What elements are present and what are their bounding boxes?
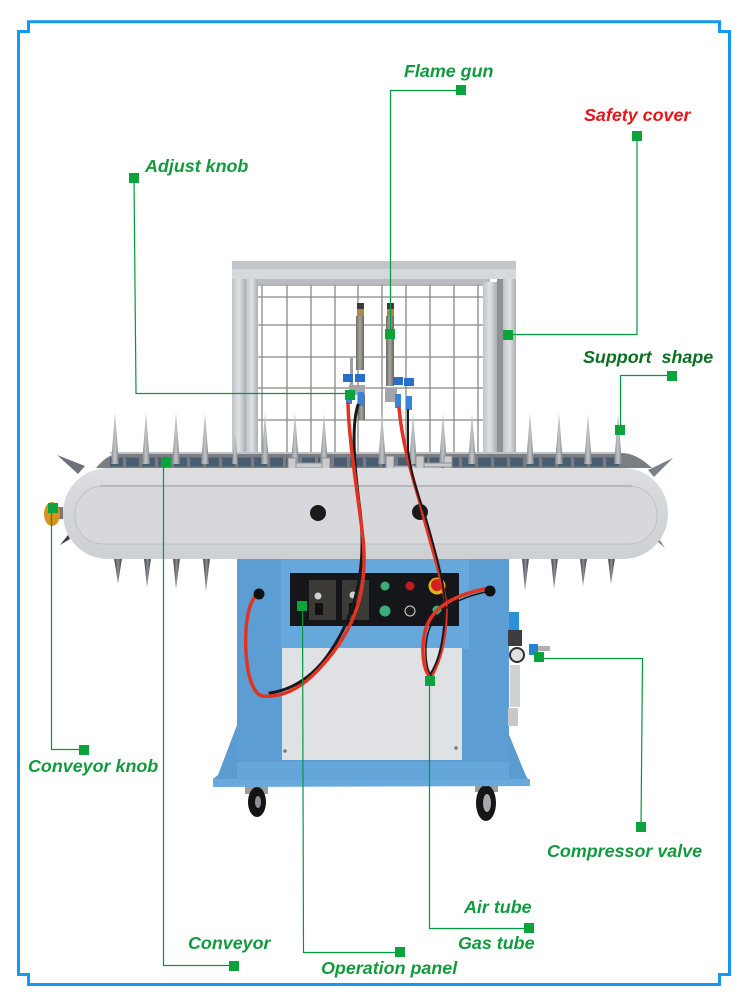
callout: Safety cover [503,105,691,340]
callout: Compressor valve: Compressor valve [547,841,702,861]
callout: Conveyor: Conveyor [188,933,272,953]
stand base [213,725,530,786]
air filter and compressor valve [508,612,550,726]
leader lines [52,90,672,966]
conveyor belt [96,453,652,468]
callout: Operation panel [297,601,458,978]
hose grommets [254,586,496,600]
conveyor brackets [288,456,452,470]
callout: Support shape [583,347,713,435]
callout: Conveyor [161,457,272,971]
casters [245,784,498,821]
callout: Flame gun [385,61,494,339]
front adjustment knobs [310,504,428,521]
operation panel [290,573,459,626]
callout: Conveyor knob: Conveyor knob [28,756,158,776]
flame gun torches [349,303,397,420]
top support spikes [111,412,622,464]
machine illustration [44,261,673,821]
callout: Flame gun: Flame gun [404,61,494,81]
callout: Conveyor knob [28,503,158,776]
air and gas hoses [246,404,491,696]
safety cover frame and mesh [232,261,516,468]
blue stand [237,559,509,764]
callout: Operation panel: Operation panel [321,958,458,978]
callout: Air tube and Gas tube: Gas tube [458,933,535,953]
control housing [281,559,469,649]
callout: Air tube and Gas tube [425,676,535,953]
conveyor knob [44,502,63,526]
side spikes [57,455,673,548]
callout: Air tube and Gas tube: Air tube [463,897,532,917]
callout: Adjust knob [129,156,355,400]
callout: Safety cover: Safety cover [584,105,691,125]
conveyor body cover [63,468,668,559]
gas valve knobs [343,374,414,410]
callout: Compressor valve [534,652,702,861]
grey access door [282,648,462,760]
bottom spikes [114,558,615,591]
callout: Support shape: Support shape [583,347,713,367]
callout: Adjust knob: Adjust knob [144,156,248,176]
